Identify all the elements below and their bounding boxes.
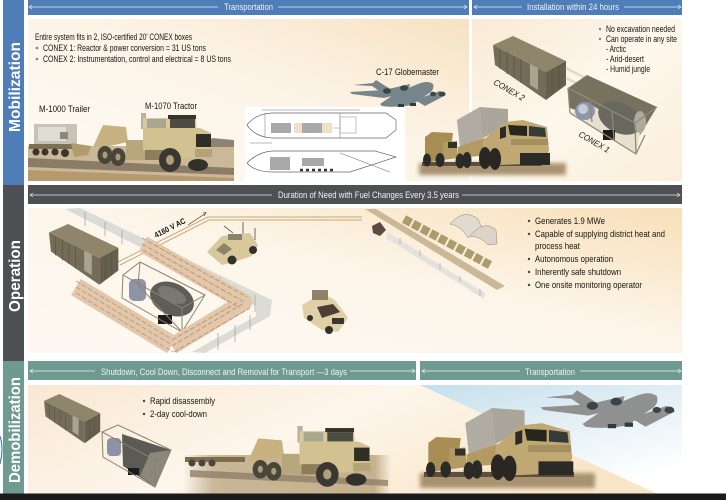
side tab: Demobilization — [3, 361, 24, 494]
ground: truck shadow — [420, 472, 595, 488]
aircraft: C-17 — [535, 390, 675, 428]
text block: demobilization bullets: Rapid disassembly — [150, 396, 215, 407]
panel: installation — [419, 19, 682, 181]
sky: diagonal background — [420, 385, 682, 494]
label: M-1070 Tractor: M-1070 Tractor — [145, 101, 197, 112]
icon: container — [44, 394, 100, 443]
sandbag wall: upper and corner — [142, 238, 250, 352]
panel: mobilization transportation — [28, 19, 469, 181]
trailer — [185, 457, 245, 466]
truck with container — [423, 107, 550, 170]
C-17 cargo diagram — [245, 107, 405, 181]
ground: truck shadow — [419, 162, 566, 175]
text block: CONEX boxes: CONEX 1: Reactor & power conversion = 31 US tons — [43, 43, 206, 54]
header bar: Shutdown — [28, 361, 416, 380]
panel: demobilization — [28, 385, 682, 494]
text block: operation bullets: Autonomous operation — [535, 254, 613, 265]
label: 4160 V AC: 4160 V AC — [153, 216, 187, 240]
truck with container — [426, 408, 573, 481]
text block: site bullets: - Humid jungle — [606, 64, 650, 75]
text block: operation bullets: One onsite monitoring operator — [535, 280, 642, 291]
shelters — [450, 215, 497, 245]
text block: demobilization bullets: 2-day cool-down — [150, 409, 207, 420]
icon: CONEX 1 open frame — [568, 75, 657, 154]
ground: desert — [28, 138, 234, 181]
fence: road — [386, 232, 485, 299]
text block: site bullets: No excavation needed — [606, 24, 675, 35]
ground: desert — [183, 455, 391, 494]
text block: operation bullets — [528, 216, 665, 291]
label: M-1000 Trailer: M-1000 Trailer — [39, 104, 90, 115]
header bar: Transportation (mobilization) — [28, 0, 469, 15]
header bar: Transportation (demobilization): Transportation — [525, 367, 575, 378]
text block: site bullets: Can operate in any site — [606, 34, 677, 45]
header bar: Duration of Need: Duration of Need with Fuel Changes Every 3.5 years — [278, 190, 459, 201]
power line — [118, 217, 362, 265]
icon: armored vehicle 2 — [302, 290, 348, 334]
arrow: power flow — [188, 212, 206, 225]
header bar: Shutdown: Shutdown, Cool Down, Disconnect and Removal for Transport —3 days — [101, 367, 347, 378]
fence — [65, 208, 272, 353]
side tab: Operation: Operation — [7, 240, 24, 312]
text block: operation bullets: process heat — [535, 241, 580, 252]
label: C-17 Globemaster: C-17 Globemaster — [376, 67, 439, 78]
side tab: Operation — [3, 185, 24, 361]
text block: demobilization bullets — [143, 396, 215, 420]
label: CONEX 1: CONEX 1 — [577, 129, 612, 155]
text block: CONEX boxes: CONEX 2: Instrumentation, control and electrical = 8 US tons — [43, 54, 231, 65]
text block: site bullets: - Arctic — [606, 44, 626, 55]
connection pipes — [566, 68, 585, 84]
text block: site bullets — [599, 24, 677, 75]
icon: reactor in frame — [122, 262, 205, 332]
icon: container — [49, 224, 118, 285]
header bar: Transportation (demobilization) — [420, 361, 682, 380]
side tab: Mobilization — [3, 0, 24, 185]
sandbag wall: lower — [76, 281, 173, 352]
header bar: Installation within 24 hours — [472, 0, 682, 15]
aircraft: C-17 — [346, 80, 446, 107]
M-1070 tractor — [93, 113, 212, 172]
M-1070 tractor — [248, 426, 371, 487]
road — [365, 209, 505, 290]
icon: armored vehicle 1 — [207, 222, 258, 265]
side tab: Mobilization: Mobilization — [7, 42, 24, 132]
guard building — [372, 222, 386, 236]
header bar: Transportation (mobilization): Transportation — [224, 2, 273, 13]
icon: reactor in frame — [102, 425, 171, 487]
text block: operation bullets: Inherently safe shutdown — [535, 267, 621, 278]
header bar: Installation within 24 hours: Installation within 24 hours — [527, 2, 619, 13]
icon: CONEX 2 container — [493, 36, 566, 100]
panel: operation — [28, 208, 682, 353]
header bar: Duration of Need — [28, 185, 682, 204]
text block: CONEX boxes — [35, 32, 231, 65]
side tab: Demobilization: Demobilization — [7, 377, 24, 483]
text block: operation bullets: Capable of supplying district heat and — [535, 229, 665, 240]
label: CONEX 2: CONEX 2 — [492, 77, 527, 103]
storage pallets — [404, 219, 490, 265]
decorative arc — [0, 436, 2, 464]
text block: site bullets: - Arid-desert — [606, 54, 644, 65]
footer bar — [0, 494, 726, 500]
text block: operation bullets: Generates 1.9 MWe — [535, 216, 605, 227]
text block: CONEX boxes: Entire system fits in 2, ISO-certified 20' CONEX boxes — [35, 32, 192, 43]
M-1000 trailer with cargo — [29, 124, 91, 157]
